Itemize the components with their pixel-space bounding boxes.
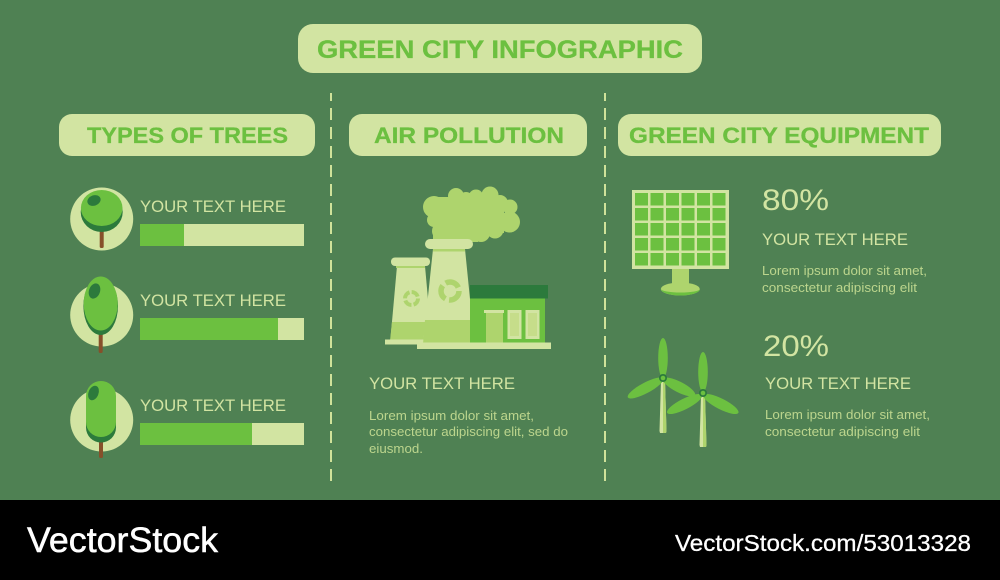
air pollution body text: Lorem ipsum dolor sit amet,: [369, 409, 534, 423]
solar body text: consectetur adipiscing elit: [762, 281, 918, 295]
icon: smoke cloud: [423, 186, 520, 242]
panel: types of trees: [70, 188, 304, 458]
heading: green city equipment: GREEN CITY EQUIPMENT: [629, 123, 929, 148]
80 percent value: 80%: [762, 184, 829, 217]
air pollution label: YOUR TEXT HERE: [369, 374, 515, 393]
heading: green city equipment: [618, 114, 941, 156]
factory base: [417, 342, 551, 349]
icon: large cooling tower: [385, 239, 474, 344]
icon: columnar tree: [70, 381, 133, 458]
icon: wind turbines: [625, 338, 741, 447]
heading: air pollution: [349, 114, 587, 156]
icon: small cooling tower: [390, 258, 432, 344]
20 percent value: 20%: [763, 330, 829, 363]
bar 3: [140, 423, 304, 445]
watermark bar: VectorStock: [27, 520, 218, 560]
heading: types of trees: TYPES OF TREES: [87, 123, 288, 148]
solar body text: Lorem ipsum dolor sit amet,: [762, 264, 927, 278]
label 1: YOUR TEXT HERE: [140, 197, 286, 216]
bar 2: [140, 318, 304, 340]
air pollution body text: [369, 409, 568, 456]
solar label: YOUR TEXT HERE: [762, 230, 908, 249]
wind body text: Lorem ipsum dolor sit amet,: [765, 408, 930, 422]
heading: types of trees: [59, 114, 315, 156]
watermark bar: VectorStock.com/53013328: [675, 530, 971, 556]
heading: air pollution: AIR POLLUTION: [374, 123, 564, 148]
wind body text: consectetur adipiscing elit: [765, 425, 921, 439]
solar body text: [762, 264, 927, 295]
icon: solar panel: [632, 190, 729, 296]
bar 1: [140, 224, 304, 246]
label 2: YOUR TEXT HERE: [140, 291, 286, 310]
air pollution body text: eiusmod.: [369, 442, 423, 456]
watermark bar: [0, 500, 1000, 580]
icon: factory building: [470, 285, 548, 344]
title: GREEN CITY INFOGRAPHIC: [317, 36, 683, 64]
icon: oval tree: [70, 276, 133, 353]
air pollution body text: consectetur adipiscing elit, sed do: [369, 425, 568, 439]
panel: green city equipment: [625, 184, 930, 447]
wind label: YOUR TEXT HERE: [765, 374, 911, 393]
title: [298, 24, 702, 73]
wind body text: [765, 408, 930, 439]
icon: round tree: [70, 188, 133, 250]
panel: air pollution: [369, 186, 568, 456]
label 3: YOUR TEXT HERE: [140, 396, 286, 415]
